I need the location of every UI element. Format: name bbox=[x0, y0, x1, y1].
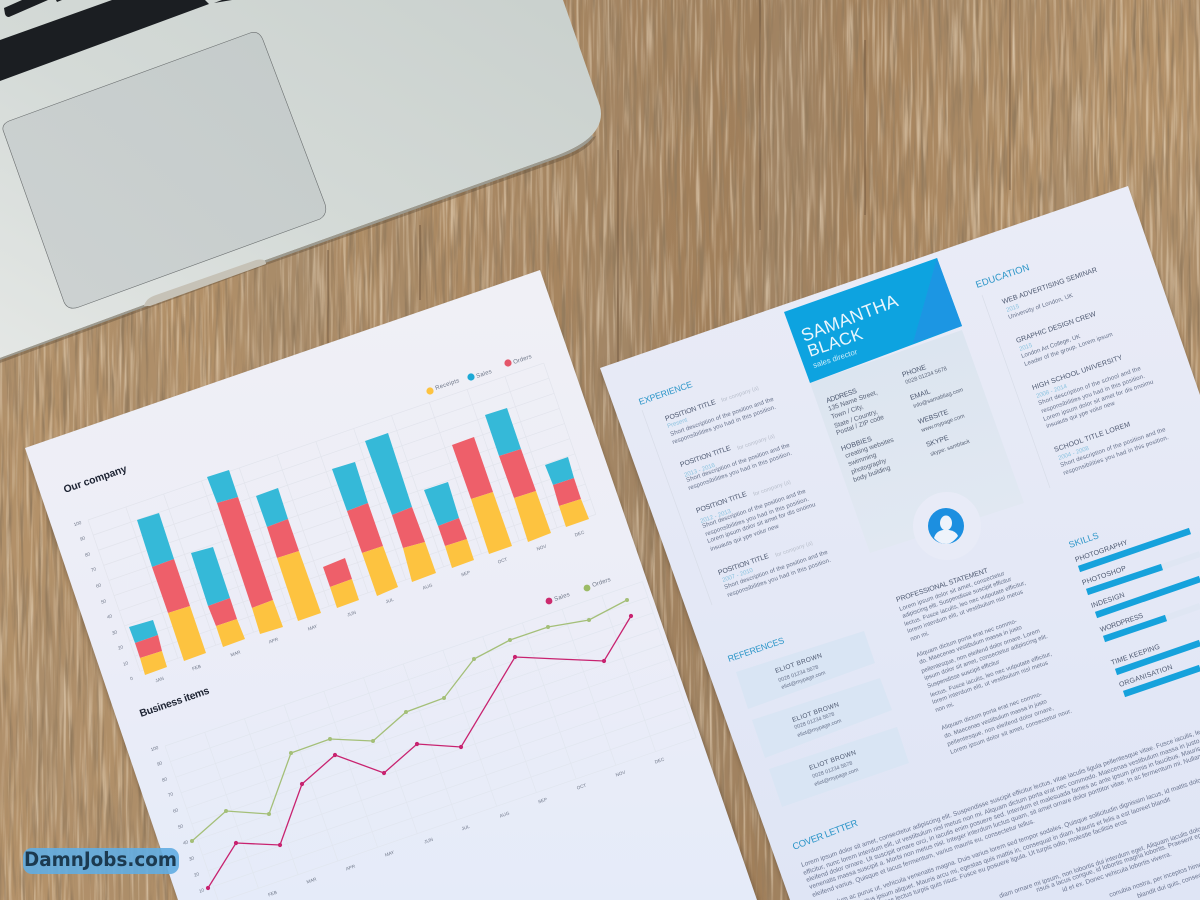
section: professional statement: ipsum dolor sit amet, consectetur adipiscing elit. bbox=[924, 634, 1049, 682]
line chart axis labels: 10 bbox=[198, 887, 205, 894]
line chart axis labels: 50 bbox=[177, 823, 184, 830]
section: professional statement: pellentesque, non eleifend dolor ornare, bbox=[947, 706, 1055, 748]
line chart axis labels: MAR bbox=[306, 876, 318, 885]
section: skills: ORGANISATION bbox=[1118, 664, 1174, 689]
bar chart axis labels: 80 bbox=[84, 551, 91, 558]
section: experience: responsibilities you had in this position. bbox=[705, 497, 810, 538]
section: experience bbox=[637, 379, 832, 605]
name banner: SAMANTHA bbox=[798, 291, 901, 346]
section: education: EDUCATION bbox=[974, 262, 1031, 291]
section: experience: responsibilities you had in this position. bbox=[727, 558, 832, 599]
section: experience: 2007 - 2010 bbox=[722, 568, 755, 584]
section: skills: INDESIGN bbox=[1090, 592, 1126, 610]
section: skills: TIME KEEPING bbox=[1110, 644, 1161, 667]
section: experience: for company (a) bbox=[737, 433, 776, 452]
line chart axis labels: SEP bbox=[537, 797, 548, 804]
bar chart axis labels: DEC bbox=[574, 529, 586, 538]
section: professional statement: do. Maecenas vestibulum massa in justo bbox=[944, 699, 1048, 740]
bar chart axis labels: 0 bbox=[129, 676, 134, 681]
line chart axis labels: 80 bbox=[161, 776, 168, 783]
section: experience: Short description of the position and the bbox=[670, 397, 775, 438]
bar chart axis labels: 10 bbox=[122, 660, 129, 667]
line chart axis labels bbox=[150, 745, 666, 897]
section: skills: PHOTOSHOP bbox=[1081, 565, 1127, 587]
section: references: ELIOT BROWN bbox=[791, 701, 840, 724]
legend: line chart: Orders bbox=[592, 577, 612, 589]
panel: contact details: SKYPE bbox=[925, 435, 950, 449]
icon: person avatar bbox=[913, 492, 981, 560]
section: skills: WORDPRESS bbox=[1099, 613, 1145, 634]
section: education: Lorem ipsum dolor sit amet for dis onoimu bbox=[1043, 379, 1154, 423]
section: professional statement: Aliquam dictum porta erat nec commo- bbox=[916, 619, 1018, 659]
watermark: DamnJobs.com: DamnJobs.com bbox=[24, 848, 177, 871]
shadow under papers bbox=[25, 189, 1200, 900]
panel: contact details: swimming bbox=[847, 452, 878, 468]
bar chart axis labels: OCT bbox=[497, 557, 508, 565]
trackpad bbox=[3, 32, 326, 308]
section: education bbox=[974, 262, 1170, 488]
bar chart axis labels: JAN bbox=[155, 676, 164, 683]
line chart grid bbox=[165, 582, 696, 900]
bar chart axis labels: 40 bbox=[106, 613, 113, 620]
section: references: eliot@mypage.com bbox=[797, 718, 843, 739]
section: experience: 2013 - 2016 bbox=[684, 463, 717, 479]
bar chart axis labels: AUG bbox=[422, 582, 433, 591]
line chart axis labels: NOV bbox=[615, 769, 627, 778]
panel: contact details: HOBBIES bbox=[840, 436, 873, 453]
line chart axis labels: OCT bbox=[576, 783, 587, 791]
bar chart axis labels: JUL bbox=[385, 597, 395, 604]
section: professional statement: do. Maecenas vestibulum massa in justo bbox=[919, 625, 1023, 666]
section: references: REFERENCES bbox=[726, 635, 786, 664]
section: professional statement: non mi. bbox=[910, 631, 931, 643]
section: experience: POSITION TITLE bbox=[717, 553, 770, 577]
legend: bar chart bbox=[426, 354, 533, 395]
panel: contact details: 0028 01234 5678 bbox=[905, 366, 948, 386]
section: education: 2015 bbox=[1006, 304, 1021, 314]
line chart axis labels: 60 bbox=[172, 807, 179, 814]
section: references: eliot@mypage.com bbox=[814, 767, 860, 788]
bar chart axis labels: SEP bbox=[460, 570, 471, 577]
section: professional statement: Lorem ipsum dolor sit amet, consectetur nour. bbox=[950, 708, 1073, 756]
section: education: London Art College, UK bbox=[1021, 334, 1081, 360]
panel: contact details: EMAIL bbox=[909, 388, 932, 402]
section: experience: insuauts qui ype volur new bbox=[710, 524, 780, 553]
line chart axis labels: 30 bbox=[188, 855, 195, 862]
name banner bbox=[784, 258, 962, 383]
line chart axis labels: 100 bbox=[150, 745, 159, 752]
section: professional statement: adipiscing elit. Suspendisse suscipit efficitur bbox=[902, 577, 1012, 620]
panel: resume sheet bbox=[600, 186, 1200, 900]
section: professional statement: Suspendisse suscipit efficitur bbox=[927, 659, 1001, 690]
section: education: University of London, UK bbox=[1008, 293, 1074, 321]
line chart axis labels: 40 bbox=[182, 839, 189, 846]
section: education: responsibilities you had in this position. bbox=[1041, 374, 1146, 415]
legend: bar chart: Orders bbox=[513, 354, 533, 366]
section: education: GRAPHIC DESIGN CREW bbox=[1015, 311, 1097, 345]
section: experience: responsibilities you had in this position. bbox=[672, 405, 777, 446]
section: education: 2008 - 2014 bbox=[1036, 384, 1069, 400]
section: cover letter: eleifend varius. Quisque et lacus fermentum, varius mauris eu, consectetur tellus. bbox=[811, 818, 1036, 899]
section: education: Leader of the group. Lorem ipsum bbox=[1024, 332, 1114, 368]
panel: contact details: PHONE bbox=[901, 364, 928, 379]
panel: contact details: info@samabliag.com bbox=[913, 387, 964, 410]
section: experience: EXPERIENCE bbox=[637, 379, 694, 407]
panel: contact details: Town / City, bbox=[830, 403, 865, 421]
panel: contact details: www.mypage.com bbox=[920, 413, 966, 434]
section: skills: PHOTOGRAPHY bbox=[1074, 539, 1129, 564]
legend: bar chart: Sales bbox=[476, 369, 493, 380]
section: experience: 2012 - 2013 bbox=[700, 509, 733, 525]
panel: contact details: creating websites bbox=[844, 436, 895, 460]
section: experience: for company (a) bbox=[753, 479, 792, 498]
section: professional statement: PROFESSIONAL STATEMENT bbox=[895, 567, 990, 604]
heading: Business items: Business items bbox=[138, 686, 211, 720]
section: references: eliot@mypage.com bbox=[781, 670, 827, 691]
stacked bars bbox=[129, 408, 589, 675]
name banner: sales director bbox=[812, 347, 859, 370]
trackpad lip notch bbox=[144, 260, 266, 306]
panel: contact details: 135 Name Street, bbox=[827, 389, 879, 413]
bar chart axis labels: 60 bbox=[95, 582, 102, 589]
bar chart axis labels: 70 bbox=[90, 566, 97, 573]
section: references: 0028 01234 5678 bbox=[778, 665, 819, 684]
panel: contact details: ADDRESS bbox=[825, 388, 858, 405]
section: skills: SKILLS bbox=[1067, 530, 1100, 550]
bar chart axis labels: 30 bbox=[111, 629, 118, 636]
line chart axis labels: JUN bbox=[423, 837, 434, 844]
bar chart axis labels: 100 bbox=[73, 520, 82, 527]
panel: contact details: Postal / ZIP code bbox=[835, 414, 885, 437]
section: professional statement: lectus. Fusce iaculis, leo nec vulputate efficitur, bbox=[930, 651, 1053, 699]
bar chart axis labels: 90 bbox=[79, 535, 86, 542]
bar chart axis labels: MAY bbox=[307, 624, 318, 632]
bar chart axis labels: JUN bbox=[346, 610, 357, 617]
section: education: HIGH SCHOOL UNIVERSITY bbox=[1031, 354, 1124, 392]
section: references: ELIOT BROWN bbox=[774, 652, 823, 675]
bar chart axis labels: 20 bbox=[117, 644, 124, 651]
section: experience: for company (a) bbox=[775, 540, 814, 559]
section: professional statement: lorem interdum elit, ut vestibulum nisl metus bbox=[907, 589, 1024, 635]
line chart axis labels: JUL bbox=[461, 824, 471, 831]
heading: Our company: Our company bbox=[62, 464, 129, 496]
section: experience: responsibilities you had in this position. bbox=[688, 451, 793, 492]
panel: sales report sheet bbox=[25, 270, 757, 900]
section: education: Short description of the school and the bbox=[1038, 366, 1142, 407]
section: education: SCHOOL TITLE LOREM bbox=[1053, 421, 1131, 454]
line chart axis labels: FEB bbox=[267, 890, 278, 897]
line chart axis labels: DEC bbox=[654, 756, 666, 765]
panel: contact details: skype: samblack bbox=[930, 439, 971, 458]
section: cover letter: id et ex. Donec vehicula lobortis viverra. bbox=[1061, 851, 1173, 894]
bar chart axis labels: 50 bbox=[100, 598, 107, 605]
line: sales bbox=[206, 614, 633, 890]
section: professional statement bbox=[895, 567, 1073, 756]
section: professional statement: Lorem ipsum dolor sit amet, consectetur bbox=[899, 571, 1006, 613]
keyboard keys bbox=[0, 0, 232, 81]
section: professional statement: lectus. Fusce iaculis, leo nec vulputate efficitur, bbox=[904, 580, 1027, 628]
panel: contact details: photography bbox=[850, 457, 888, 476]
section: references: 0028 01234 5678 bbox=[794, 712, 835, 731]
line chart axis labels: 90 bbox=[156, 760, 163, 767]
legend: line chart: Sales bbox=[554, 592, 571, 603]
section: education: responsibilities you had in this position. bbox=[1063, 435, 1170, 477]
legend: line chart bbox=[546, 577, 612, 604]
panel: contact details: WEBSITE bbox=[917, 409, 950, 426]
section: experience: POSITION TITLE bbox=[679, 445, 732, 469]
section: experience: Present bbox=[667, 417, 689, 430]
section: education: 2015 bbox=[1019, 343, 1034, 353]
section: education: 2004 - 2008 bbox=[1058, 446, 1091, 462]
section: professional statement: pellentesque, non eleifend dolor ornare. Lorem bbox=[921, 629, 1041, 675]
legend: bar chart: Receipts bbox=[435, 378, 460, 392]
bar chart axis labels: APR bbox=[268, 636, 279, 644]
line: orders bbox=[190, 598, 629, 843]
section: experience: Short description of the position and the bbox=[686, 443, 791, 484]
laptop body bbox=[0, 0, 601, 358]
section: education: insuauts qui ype volur new bbox=[1046, 401, 1116, 430]
section: education: Short description of the position and the bbox=[1060, 427, 1167, 469]
bar chart axis labels: MAR bbox=[230, 649, 242, 658]
section: education: WEB ADVERTISING SEMINAR bbox=[1001, 267, 1098, 306]
section: experience: POSITION TITLE bbox=[664, 399, 717, 423]
panel: contact details bbox=[784, 258, 1024, 553]
section: references: ELIOT BROWN bbox=[808, 749, 857, 772]
section: experience: for company (a) bbox=[721, 385, 760, 404]
bar chart grid bbox=[88, 363, 596, 671]
name banner: BLACK bbox=[805, 324, 866, 361]
laptop bbox=[0, 0, 601, 363]
panel: contact details: State / Country, bbox=[833, 408, 879, 430]
line chart axis labels: 20 bbox=[193, 871, 200, 878]
line chart axis labels: APR bbox=[345, 863, 356, 871]
bar chart axis labels bbox=[73, 520, 586, 683]
section: references: 0028 01234 5678 bbox=[812, 761, 853, 780]
line chart axis labels: MAY bbox=[384, 850, 395, 858]
section: references bbox=[726, 631, 909, 807]
section: experience: Short description of the position and the bbox=[724, 550, 829, 591]
section: professional statement: non mi. bbox=[935, 702, 956, 714]
section: experience: Short description of the position and the bbox=[702, 489, 807, 530]
panel: contact details: body building bbox=[852, 465, 892, 484]
bar chart axis labels: NOV bbox=[536, 543, 548, 552]
section: skills bbox=[1067, 530, 1200, 694]
section: cover letter: COVER LETTER bbox=[791, 818, 860, 853]
laptop edge shadow bbox=[0, 136, 596, 363]
line chart axis labels: AUG bbox=[499, 810, 510, 819]
section: professional statement: Aliquam dictum porta erat nec commo- bbox=[941, 692, 1043, 732]
section: experience: POSITION TITLE bbox=[695, 491, 748, 515]
line chart axis labels: 70 bbox=[167, 791, 174, 798]
section: experience: Lorem ipsum dolor sit amet for dis onoimu bbox=[707, 502, 816, 545]
section: professional statement: lorem interdum elit, ut vestibulum nisl metus bbox=[932, 660, 1049, 706]
bar chart axis labels: FEB bbox=[191, 664, 202, 671]
